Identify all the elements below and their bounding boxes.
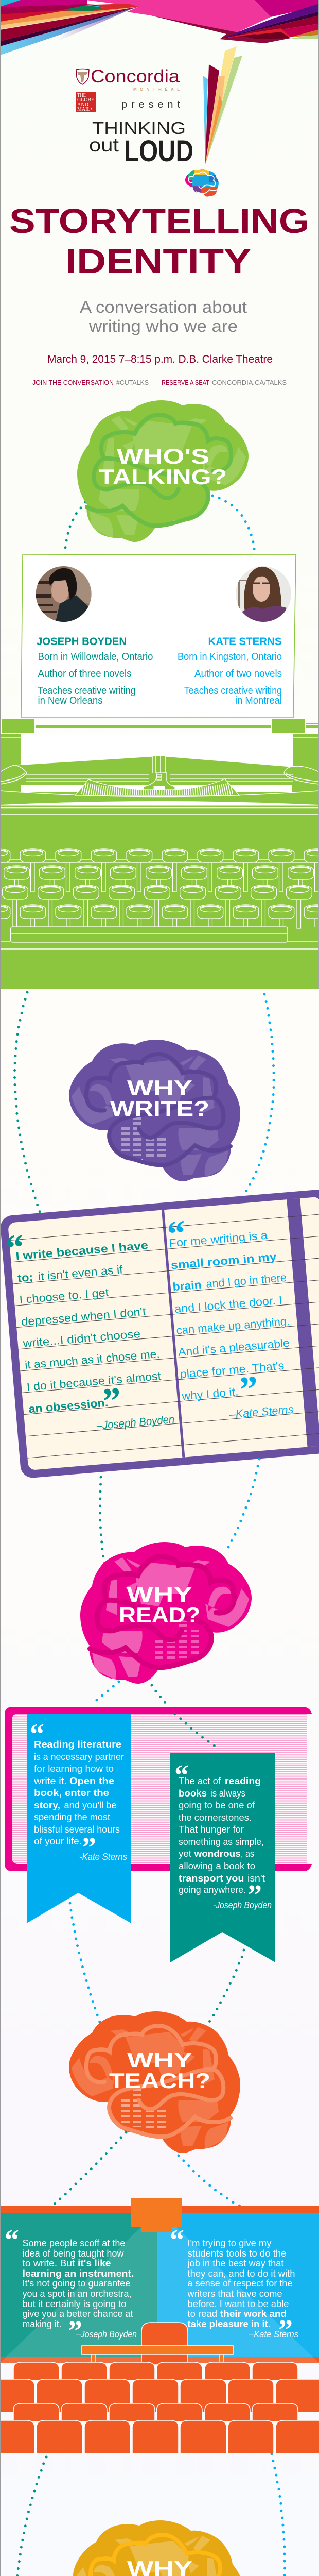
icon: exclamation mark shards (203, 46, 242, 164)
bookmark: Joseph Boyden on reading: ” (247, 1879, 262, 1911)
brain: why read: WHY (127, 1582, 192, 1606)
brain: who's talking: TALKING? (99, 465, 227, 489)
bookmark: Joseph Boyden on reading: books (179, 1788, 207, 1799)
quote: Joseph Boyden on writing: –Joseph Boyden (96, 1413, 175, 1432)
bookmark: Kate Sterns on reading: and you'll be (64, 1800, 116, 1810)
photo: Kate Sterns (236, 566, 291, 622)
logo: The Globe and Mail: THE (77, 93, 86, 98)
quote: Kate Sterns on teaching: before. I want to be able (187, 2298, 289, 2309)
bookmark: Kate Sterns on reading: “ (30, 1718, 44, 1750)
icon: multicoloured brain (185, 169, 219, 197)
panel: notebook (0, 1189, 319, 1479)
brain: why teach: TEACH? (109, 2069, 210, 2093)
quote: Joseph Boyden on teaching: you a spot in an orchestra, (23, 2288, 132, 2299)
quote: Kate Sterns on writing: place for me. That's (180, 1359, 285, 1381)
bookmark: Joseph Boyden on reading: going to be one of (179, 1800, 255, 1810)
logo: The Globe and Mail: MAIL• (77, 107, 92, 112)
bookmark: Joseph Boyden on reading (170, 1753, 275, 1962)
brain: why read (80, 1542, 252, 1684)
logo: The Globe and Mail: GLOBE (77, 97, 94, 103)
spotlight lamp (131, 2198, 182, 2232)
quote: Joseph Boyden on teaching: idea of being taught how (23, 2248, 124, 2259)
logo: Thinking out Loud (89, 118, 193, 168)
logo: Concordia (76, 66, 180, 92)
bio: Joseph Boyden: JOSEPH BOYDEN (37, 636, 127, 648)
title: STORYTELLING (9, 202, 309, 241)
logo: Thinking out Loud: LOUD (124, 134, 193, 168)
bio: Joseph Boyden: Author of three novels (38, 668, 132, 680)
quote: Kate Sterns on teaching (170, 2224, 298, 2346)
quote: Kate Sterns on writing: and I lock the door. I (174, 1294, 283, 1315)
quote: Kate Sterns on writing: can make up anything. (176, 1315, 290, 1337)
dotted connectors: to why books (15, 2454, 285, 2576)
brain: why write: WRITE? (110, 1096, 209, 1121)
bookmark: Kate Sterns on reading: spending the most (34, 1812, 110, 1822)
join and reserve line: JOIN THE CONVERSATION (32, 379, 114, 386)
bio: Joseph Boyden: Teaches creative writing (38, 685, 136, 697)
bookmark: Joseph Boyden on reading: -Joseph Boyden (213, 1900, 272, 1910)
bookmark: Kate Sterns on reading: write it. (33, 1776, 67, 1786)
bookmark: Kate Sterns on reading: Reading literature (34, 1739, 121, 1750)
quote: Kate Sterns on writing: brain (172, 1278, 202, 1293)
quote: Kate Sterns on teaching: take pleasure in it. (187, 2318, 271, 2329)
photo: Joseph Boyden (36, 566, 92, 622)
quote: Joseph Boyden on teaching: Some people scoff at the (23, 2238, 126, 2248)
quote: Kate Sterns on writing: why I do it. (181, 1385, 239, 1403)
join and reserve line: #CUTALKS (116, 379, 149, 386)
bio: Joseph Boyden: Born in Willowdale, Ontario (38, 651, 153, 663)
quote: Joseph Boyden on writing: to; (17, 1270, 33, 1284)
quote: Joseph Boyden on teaching: give you a better chance at (23, 2308, 133, 2319)
bookmark: Joseph Boyden on reading: is always (210, 1788, 245, 1799)
subtitle: A conversation about (80, 298, 247, 316)
quote: Joseph Boyden on teaching: but it certainly is going to (23, 2298, 127, 2309)
quote: Joseph Boyden on teaching: ” (68, 2315, 82, 2347)
bookmark: Kate Sterns on reading: of your life. (34, 1836, 82, 1846)
bookmark: Kate Sterns on reading: -Kate Sterns (79, 1852, 127, 1862)
quote: Joseph Boyden on writing: ” (101, 1380, 123, 1422)
brain: why write (69, 1040, 240, 1181)
quote: Kate Sterns on writing: “ (166, 1212, 187, 1255)
quote: Joseph Boyden on writing: write...I didn't choose (22, 1327, 141, 1350)
quote: Joseph Boyden on teaching (5, 2224, 137, 2347)
quote: Joseph Boyden on teaching: it's like (78, 2258, 111, 2268)
quote: Joseph Boyden on teaching: –Joseph Boyden (76, 2329, 137, 2340)
quote: Kate Sterns on teaching: a sense of respect for the (187, 2278, 292, 2289)
quote: Kate Sterns on writing (166, 1204, 298, 1425)
illustration: typewriter (0, 719, 319, 989)
top corner geometric decoration (0, 0, 319, 55)
illustration: lecture desk and chair (82, 2323, 233, 2365)
panel: speaker paper (21, 554, 296, 718)
quote: Kate Sterns on writing: –Kate Sterns (228, 1403, 294, 1421)
present: present (121, 99, 180, 110)
bookmark: Kate Sterns on reading: for learning how to (34, 1764, 114, 1774)
bio: Kate Sterns: Teaches creative writing (184, 685, 282, 697)
bio: Kate Sterns: Author of two novels (194, 668, 282, 680)
quote: Joseph Boyden on writing: I write because I have (15, 1239, 149, 1263)
illustration: theatre seats (0, 2362, 319, 2453)
join and reserve line: CONCORDIA.CA/TALKS (212, 379, 287, 386)
bookmark: Kate Sterns on reading: story, (34, 1800, 60, 1810)
quote: Joseph Boyden on writing: an obsession. (28, 1396, 109, 1416)
subtitle (80, 298, 247, 335)
bookmark: Joseph Boyden on reading: allowing a book to (179, 1861, 255, 1871)
bio: Kate Sterns: in Montreal (235, 695, 282, 706)
quote: Joseph Boyden on teaching: “ (5, 2224, 19, 2256)
brain: why books (73, 2520, 244, 2576)
brain: who's talking: WHO'S (117, 444, 209, 468)
bio: Joseph Boyden: in New Orleans (38, 695, 103, 706)
quote: Joseph Boyden on writing: I choose to. I get (19, 1286, 109, 1306)
quote: Kate Sterns on teaching: I'm trying to give my (187, 2238, 272, 2248)
join and reserve line: RESERVE A SEAT (162, 379, 209, 386)
bookmark: Joseph Boyden on reading: wondrous (194, 1849, 241, 1859)
logo: Concordia: Concordia (91, 66, 180, 87)
bookmark: Joseph Boyden on reading: , as (241, 1849, 254, 1859)
dotted connectors: from why teach to stage (54, 2132, 240, 2206)
quote: Joseph Boyden on writing: “ (4, 1226, 26, 1269)
bookmark: Joseph Boyden on reading: something as simple, (179, 1837, 264, 1847)
bookmark: Kate Sterns on reading: ” (82, 1832, 96, 1864)
bookmark: Joseph Boyden on reading: going anywhere. (179, 1885, 246, 1895)
event date and place: March 9, 2015 7–8:15 p.m. D.B. Clarke Theatre (47, 353, 273, 365)
brain: why read: READ? (119, 1603, 200, 1627)
quote: Kate Sterns on writing: For me writing is a (168, 1229, 269, 1250)
quote: Joseph Boyden on writing: I do it because it's almost (26, 1369, 162, 1394)
quote: Kate Sterns on teaching: students tools to do the (187, 2248, 286, 2259)
quote: Kate Sterns on teaching: writers that have come (187, 2288, 282, 2299)
title (9, 202, 309, 281)
subtitle: writing who we are (88, 317, 238, 335)
quote: Kate Sterns on teaching: their work and (220, 2308, 287, 2319)
bookmark: Joseph Boyden on reading: “ (174, 1759, 189, 1791)
logo: Thinking out Loud: THINKING (92, 118, 186, 138)
logo: The Globe and Mail (76, 92, 96, 112)
quote: Joseph Boyden on writing: depressed when I don't (21, 1305, 146, 1328)
dotted connectors: from why read to book (92, 1682, 165, 1704)
logo: Concordia: MONTRÉAL (133, 87, 180, 92)
bio: Kate Sterns (178, 636, 282, 706)
quote: Joseph Boyden on writing: it isn't even as if (38, 1263, 123, 1283)
quote: Joseph Boyden on teaching: learning an instrument. (23, 2268, 134, 2279)
bookmark: Kate Sterns on reading: book, enter the (34, 1788, 109, 1798)
bookmark: Kate Sterns on reading (27, 1714, 131, 1923)
bookmark: Joseph Boyden on reading: the cornerstones. (179, 1812, 252, 1823)
quote: Kate Sterns on teaching: they can, and to do it with (187, 2268, 295, 2279)
bookmark: Joseph Boyden on reading: isn't (247, 1873, 265, 1884)
quote: Kate Sterns on teaching: “ (170, 2224, 184, 2256)
panel: lecture theatre stage (0, 2198, 319, 2363)
bookmark: Kate Sterns on reading: is a necessary partner (34, 1752, 124, 1762)
quote: Kate Sterns on writing: small room in my (170, 1250, 277, 1272)
dotted connector: on book page (175, 1714, 220, 1750)
panel: open book (5, 1707, 312, 1871)
bookmark: Joseph Boyden on reading: The act of (179, 1776, 221, 1786)
dotted connectors: to why write (14, 992, 274, 1213)
quote: Kate Sterns on teaching: to read (187, 2308, 217, 2319)
dotted connectors: to why read (100, 1459, 259, 1565)
logo: The Globe and Mail: AND (77, 102, 88, 108)
quote: Joseph Boyden on teaching: making it. (23, 2318, 62, 2329)
bio: Kate Sterns: Born in Kingston, Ontario (178, 651, 282, 663)
dotted connectors: to why teach (70, 1903, 244, 2024)
bookmark: Kate Sterns on reading: Open the (69, 1776, 114, 1786)
bio: Joseph Boyden (37, 636, 153, 706)
brain: why write: WHY (127, 1076, 192, 1100)
logo: Thinking out Loud: out (89, 134, 119, 156)
quote: Joseph Boyden on writing (4, 1215, 175, 1438)
dotted connectors: speakers (65, 496, 255, 554)
quote: Joseph Boyden on teaching: to write. But (23, 2258, 75, 2268)
bookmark: Kate Sterns on reading: blissful several hours (34, 1824, 120, 1835)
quote: Kate Sterns on writing: ” (238, 1368, 260, 1411)
bio: Kate Sterns: KATE STERNS (208, 636, 282, 648)
bookmark: Joseph Boyden on reading: yet (179, 1849, 191, 1859)
quote: Joseph Boyden on writing: it as much as it chose me. (24, 1347, 160, 1371)
quote: Kate Sterns on writing: and I go in there (205, 1271, 287, 1291)
bookmark: Joseph Boyden on reading: transport you (179, 1873, 244, 1884)
quote: Joseph Boyden on teaching: It's not going to guarantee (23, 2278, 131, 2289)
bookmark: Joseph Boyden on reading: That hunger for (179, 1824, 244, 1835)
bookmark: Joseph Boyden on reading: reading (225, 1776, 261, 1786)
brain: why teach: WHY (127, 2048, 192, 2072)
quote: Kate Sterns on writing: And it's a pleasurable (178, 1336, 290, 1359)
quote: Kate Sterns on teaching: job in the best way that (187, 2258, 284, 2268)
brain: who's talking (77, 400, 249, 542)
join and reserve line (32, 379, 287, 386)
title: IDENTITY (65, 242, 251, 281)
quote: Kate Sterns on teaching: –Kate Sterns (249, 2329, 298, 2340)
quote: Kate Sterns on teaching: ” (278, 2314, 293, 2346)
brain: why teach (69, 2011, 240, 2153)
